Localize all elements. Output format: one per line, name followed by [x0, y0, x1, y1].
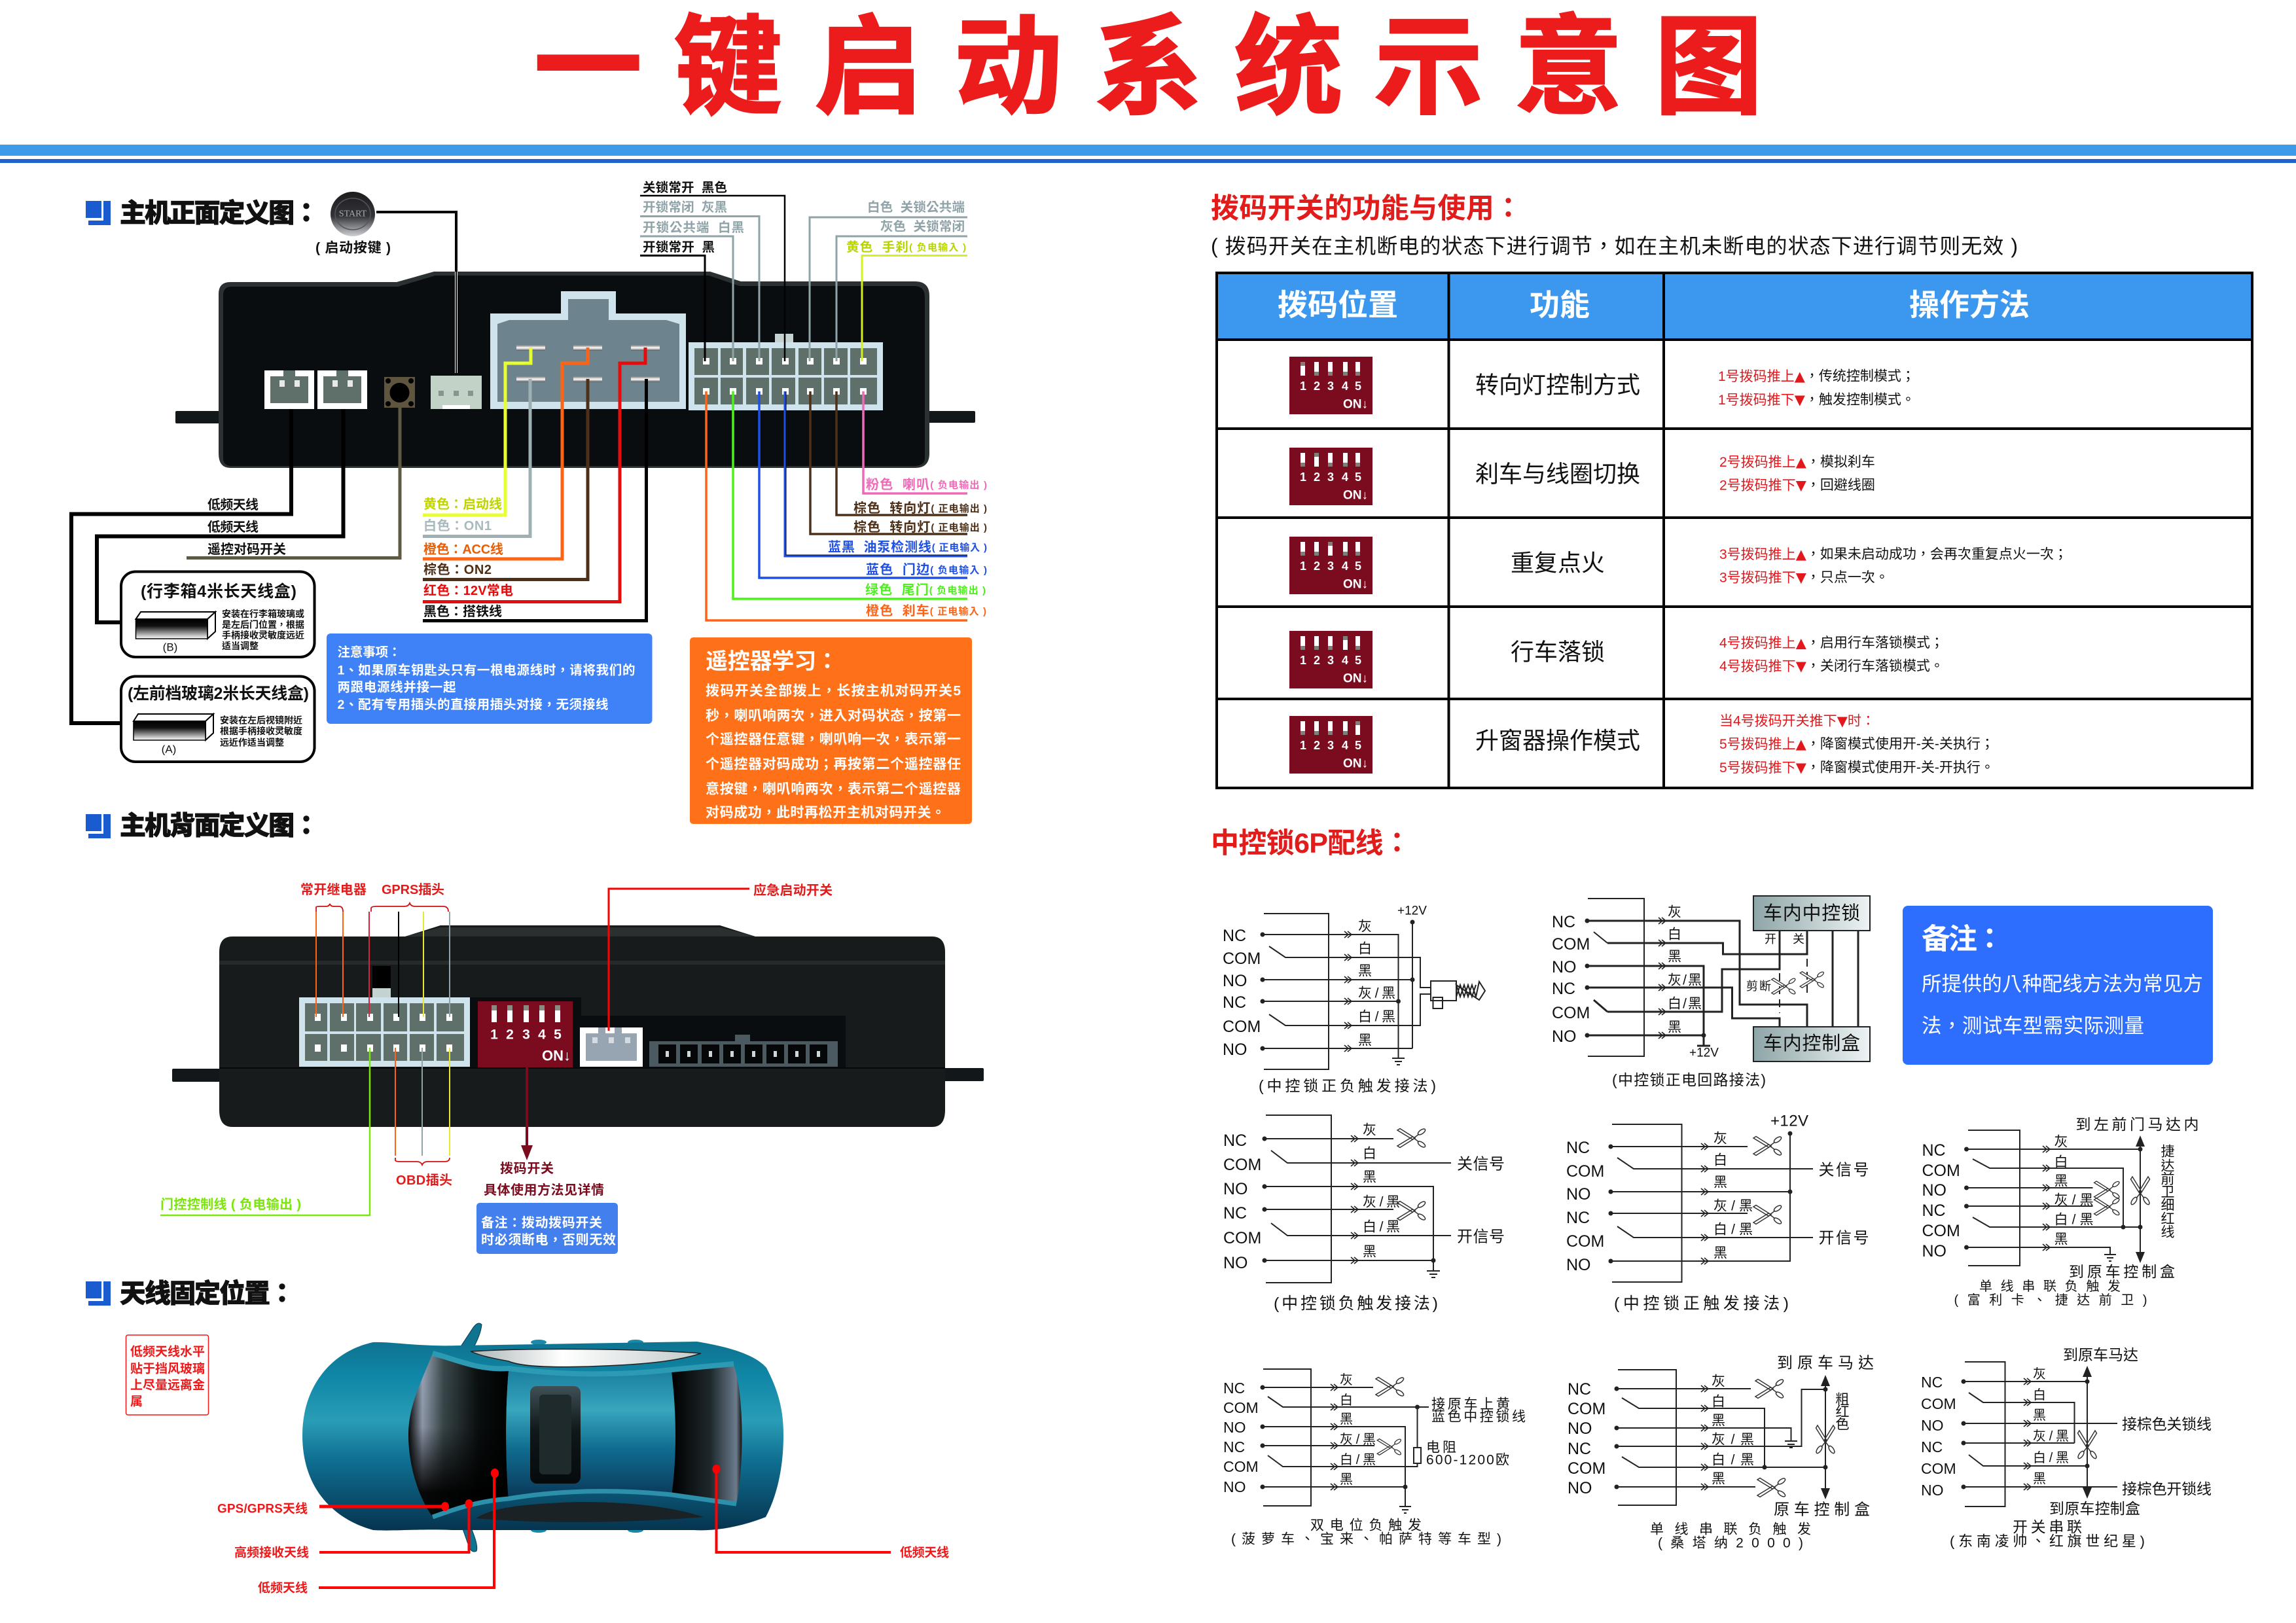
- wires: bottom of fourteen-pin plug with labels: [706, 391, 987, 620]
- diagram: negative trigger: NC: [1223, 1132, 1247, 1150]
- illustration: car from above: [302, 1323, 783, 1552]
- wires: bottom of fourteen-pin plug with labels: 棕色 转向灯( 正电输出 ): [853, 520, 987, 535]
- diagram: dual level negative trigger: NC: [1223, 1438, 1245, 1455]
- diagram: single wire series negative: NO: [1922, 1181, 1946, 1200]
- table: DIP switch functions: 功能: [1530, 288, 1590, 322]
- panel: back unit body: [172, 925, 984, 1127]
- diagram: positive and negative trigger: 灰: [1358, 919, 1372, 935]
- wires: top of fourteen-pin plug with labels: 黄色 手刹( 负电输入 ): [846, 240, 966, 255]
- diagram: positive circuit wiring: +12V: [1689, 1046, 1719, 1060]
- icon: DIP position 2: 12345: [1300, 471, 1361, 484]
- diagram: single wire series Santana: 单线串联负触发: [1650, 1522, 1811, 1537]
- heading: front definition: 主机正面定义图：: [120, 199, 319, 228]
- icon: DIP position 2: [1289, 448, 1372, 505]
- diagram: single wire series Santana: 白: [1712, 1394, 1725, 1410]
- diagram: positive circuit wiring: 黑: [1668, 949, 1681, 965]
- diagram: dual level negative trigger: 黑: [1340, 1412, 1353, 1427]
- diagram: negative trigger: 关信号: [1457, 1156, 1505, 1173]
- diagram: positive circuit wiring: 黑: [1668, 1020, 1681, 1035]
- text: DIP switch notice: ( 拨码开关在主机断电的状态下进行调节，如在主机未断电的状态下进行调节则无效 ): [1211, 234, 2018, 258]
- diagram: single wire series negative: 细: [2161, 1198, 2174, 1213]
- diagram: switch series: 白/黑: [2033, 1450, 2069, 1465]
- icon: DIP position 3: ON↓: [1343, 577, 1368, 592]
- wires: bottom of fourteen-pin plug with labels: 蓝色 门边( 负电输入 ): [866, 562, 987, 577]
- diagram: single wire series negative: 线: [2161, 1225, 2174, 1240]
- diagram: positive circuit wiring: 白: [1668, 927, 1681, 942]
- diagram: positive circuit wiring: NO: [1552, 1027, 1576, 1046]
- diagram: dual level negative trigger: 蓝色中控锁线: [1431, 1410, 1526, 1424]
- diagram: switch series: 到原车马达: [2063, 1346, 2138, 1363]
- diagram: switch series: 开关串联: [2013, 1518, 2082, 1535]
- diagram: positive trigger: NO: [1566, 1185, 1590, 1204]
- diagram: negative trigger: 黑: [1363, 1245, 1376, 1259]
- panel: remote learning: 秒，喇叭响两次，进入对码状态，按第一: [706, 708, 961, 724]
- diagram: positive trigger: (中控锁正触发接法): [1614, 1294, 1789, 1313]
- diagram: switch series: 灰: [2033, 1366, 2046, 1382]
- diagram: dual level negative trigger: 黑: [1340, 1472, 1353, 1487]
- diagram: switch series: NC: [1921, 1438, 1943, 1455]
- diagram: positive trigger: NC: [1566, 1139, 1590, 1157]
- diagram: switch series: 灰/黑: [2033, 1429, 2069, 1444]
- diagram: negative trigger: 白/黑: [1363, 1220, 1400, 1234]
- diagram: switch series: NC: [1921, 1374, 1943, 1391]
- diagram: positive circuit wiring: COM: [1552, 1004, 1590, 1022]
- callout: DIP power warning: [476, 1203, 618, 1254]
- diagram: negative trigger: 灰: [1363, 1123, 1376, 1137]
- diagram: dual level negative trigger: COM: [1223, 1399, 1259, 1416]
- diagram: switch series: 黑: [2033, 1408, 2046, 1423]
- diagram: dual level negative trigger: 白: [1340, 1393, 1353, 1408]
- diagram: single wire series negative: 捷: [2161, 1144, 2174, 1160]
- wires: bottom of fourteen-pin plug with labels: 橙色 刹车( 正电输入 ): [866, 603, 986, 618]
- diagram: positive trigger: 白: [1713, 1153, 1727, 1168]
- panel: trunk antenna box: [121, 572, 314, 657]
- diagram: dual level negative trigger: 灰/黑: [1340, 1432, 1376, 1447]
- wires: back lower with labels: 门控控制线 ( 负电输出 ): [160, 1196, 301, 1212]
- diagram: switch series: COM: [1921, 1395, 1956, 1412]
- table: DIP switch functions: [1217, 273, 2252, 788]
- wires: back upper with braces and labels: 常开继电器: [300, 882, 367, 897]
- icon: DIP position 4: ON↓: [1343, 671, 1368, 686]
- callouts: antenna positions: GPS/GPRS天线: [217, 1501, 308, 1516]
- callout: antenna mounting tip: [126, 1335, 208, 1415]
- wires: antenna and pairing with labels: [71, 408, 400, 723]
- diagram: single wire series Santana: 灰/黑: [1712, 1432, 1754, 1448]
- diagram: single wire series negative: 红: [2161, 1212, 2174, 1226]
- diagram: negative trigger: NO: [1223, 1254, 1247, 1272]
- diagram: single wire series Santana: 红: [1835, 1404, 1850, 1420]
- diagram: single wire series negative: 灰/黑: [2054, 1192, 2093, 1208]
- diagram: negative trigger: (中控锁负触发接法): [1274, 1294, 1438, 1313]
- wires: bottom of fourteen-pin plug with labels: 粉色 喇叭( 负电输出 ): [866, 477, 987, 492]
- diagram: positive trigger: NO: [1566, 1256, 1590, 1274]
- callouts: antenna positions: 高频接收天线: [234, 1544, 309, 1560]
- wires: top of fourteen-pin plug with labels: [640, 181, 967, 361]
- diagram: switch series: 接棕色开锁线: [2122, 1480, 2212, 1497]
- text: operation methods: 1号拨码推下▼，触发控制模式。: [1718, 392, 1915, 408]
- wires: top of fourteen-pin plug with labels: 关锁常开 黑色: [643, 181, 727, 195]
- diagram: single wire series Santana: [1568, 1355, 1874, 1551]
- diagram: switch series: COM: [1921, 1460, 1956, 1477]
- connector: eight-pin strip: [649, 1035, 838, 1067]
- icon: start button: ( 启动按键 ): [315, 241, 391, 255]
- diagram: dual level negative trigger: NO: [1223, 1419, 1246, 1436]
- diagram: positive trigger: 关信号: [1818, 1161, 1869, 1179]
- diagram: positive circuit wiring: (中控锁正电回路接法): [1612, 1071, 1766, 1088]
- diagram: positive circuit wiring: 灰: [1668, 904, 1681, 920]
- text: operation methods: 2号拨码推下▼，回避线圈: [1719, 478, 1875, 493]
- diagram: single wire series Santana: 色: [1835, 1418, 1850, 1432]
- diagram: negative trigger: COM: [1223, 1229, 1261, 1247]
- diagram: single wire series negative: NC: [1922, 1141, 1946, 1160]
- diagram: single wire series Santana: 原车控制盒: [1774, 1501, 1870, 1518]
- callout: wiring notes: 注意事项：: [338, 645, 401, 660]
- diagram: positive trigger: 灰: [1713, 1131, 1727, 1147]
- diagram: single wire series Santana: COM: [1568, 1459, 1605, 1478]
- wires: top of fourteen-pin plug with labels: 白色 关锁公共端: [867, 200, 965, 215]
- diagram: dual level negative trigger: 双电位负触发: [1310, 1518, 1422, 1533]
- wires: bottom of fourteen-pin plug with labels: 蓝黑 油泵检测线( 正电输入 ): [828, 539, 987, 555]
- diagram: positive and negative trigger: NO: [1223, 972, 1247, 990]
- diagram: positive trigger: 黑: [1713, 1175, 1727, 1190]
- diagram: positive circuit wiring: 白/黑: [1668, 996, 1702, 1012]
- table: DIP switch functions: 转向灯控制方式: [1475, 372, 1640, 398]
- callouts: antenna positions: 低频天线: [900, 1546, 949, 1560]
- diagram: single wire series Santana: 粗: [1835, 1393, 1850, 1407]
- connector: back twelve-pin plug: [299, 966, 470, 1067]
- icon: start button: START: [339, 209, 367, 219]
- panel: windshield antenna box: 根据手柄接收灵敏度: [220, 726, 302, 736]
- panel: windshield antenna box: 远近作适当调整: [220, 737, 284, 747]
- panel: front unit body: [175, 272, 975, 468]
- diagram: single wire series negative: 黑: [2054, 1232, 2068, 1247]
- diagram: single wire series Santana: 白/黑: [1712, 1453, 1754, 1467]
- diagram: negative trigger: NC: [1223, 1204, 1247, 1222]
- diagram: positive trigger: +12V: [1770, 1113, 1808, 1130]
- icon: DIP position 4: 12345: [1300, 654, 1361, 667]
- text: operation methods: 4号拨码推上▲，启用行车落锁模式；: [1719, 635, 1944, 651]
- diagram: positive trigger: 黑: [1713, 1246, 1727, 1260]
- diagram: dual level negative trigger: (菠萝车、宝来、帕萨特等车型): [1231, 1531, 1501, 1547]
- callout: DIP power warning: 时必须断电，否则无效: [481, 1232, 616, 1247]
- table: DIP switch functions: 刹车与线圈切换: [1475, 461, 1640, 487]
- callout: wiring notes: 1、如果原车钥匙头只有一根电源线时，请将我们的: [338, 662, 635, 678]
- diagram: dual level negative trigger: NO: [1223, 1478, 1246, 1495]
- wires: power plug with labels: 白色：ON1: [423, 518, 492, 533]
- icon: DIP position 5: ON↓: [1343, 757, 1368, 771]
- diagram: negative trigger: 开信号: [1457, 1228, 1505, 1246]
- wires: power plug with labels: 红色：12V常电: [423, 583, 513, 598]
- table: DIP switch functions: 升窗器操作模式: [1475, 727, 1640, 754]
- diagram: single wire series negative: 到原车控制盒: [2069, 1263, 2175, 1280]
- diagram: dual level negative trigger: 电阻: [1426, 1440, 1456, 1455]
- panel: trunk antenna box: 手柄接收灵敏度远近: [222, 630, 304, 640]
- text: operation methods: 1号拨码推上▲，传统控制模式；: [1718, 368, 1915, 384]
- diagram: positive and negative trigger: [1223, 904, 1485, 1094]
- diagram: positive and negative trigger: NC: [1223, 993, 1246, 1012]
- table: DIP switch functions: 操作方法: [1909, 288, 2030, 322]
- callout: wiring remark: 备注：: [1922, 923, 2004, 955]
- diagram: positive trigger: COM: [1566, 1232, 1604, 1251]
- panel: trunk antenna box: 安装在行李箱玻璃或: [222, 609, 304, 619]
- connector: large six-pin power plug: [490, 291, 686, 409]
- diagram: positive circuit wiring: 关: [1793, 933, 1804, 946]
- callout: wiring notes: [327, 633, 652, 724]
- panel: trunk antenna box: (B): [163, 641, 177, 653]
- wires: power plug with labels: 黄色：启动线: [423, 497, 502, 512]
- text: operation methods: [1718, 368, 2068, 776]
- panel: trunk antenna box: 适当调整: [222, 641, 259, 651]
- icon: DIP position 5: 12345: [1300, 739, 1361, 752]
- callout: wiring notes: 两跟电源线并接一起: [338, 679, 456, 695]
- wires: back upper with braces and labels: [300, 882, 833, 1031]
- diagram: negative trigger: 白: [1363, 1147, 1376, 1161]
- panel: windshield antenna box: (左前档玻璃2米长天线盒): [128, 684, 309, 703]
- panel: trunk antenna box: (行李箱4米长天线盒): [141, 582, 296, 601]
- diagram: single wire series negative: 白/黑: [2054, 1212, 2093, 1228]
- diagram: positive circuit wiring: NO: [1552, 958, 1576, 976]
- diagram: positive circuit wiring: COM: [1552, 935, 1590, 954]
- diagram: single wire series negative: (富利卡、捷达前卫): [1954, 1293, 2147, 1308]
- diagram: single wire series negative: 卫: [2161, 1185, 2174, 1200]
- wires: back lower with labels: [160, 1048, 452, 1215]
- table: DIP switch functions: 重复点火: [1511, 550, 1605, 576]
- diagram: positive circuit wiring: NC: [1552, 913, 1575, 931]
- callout: antenna mounting tip: 低频天线水平: [130, 1344, 205, 1359]
- text: operation methods: 5号拨码推上▲，降窗模式使用开-关-关执行；: [1719, 736, 1994, 752]
- diagram: single wire series negative: NC: [1922, 1202, 1946, 1220]
- icon: large DIP switch: ON↓: [542, 1047, 571, 1064]
- diagram: positive trigger: COM: [1566, 1162, 1604, 1181]
- text: operation methods: 3号拨码推下▼，只点一次。: [1719, 569, 1889, 585]
- wires: bottom of fourteen-pin plug with labels: 棕色 转向灯( 正电输出 ): [853, 501, 987, 516]
- wires: top of fourteen-pin plug with labels: 开锁公共端 白黑: [643, 221, 744, 235]
- diagram: positive and negative trigger: 黑: [1358, 963, 1372, 979]
- wires: back upper with braces and labels: 应急启动开关: [753, 882, 833, 898]
- callout: wiring notes: 2、配有专用插头的直接用插头对接，无须接线: [338, 698, 609, 712]
- panel: remote learning: 遥控器学习：: [706, 649, 838, 674]
- diagram: switch series: 接棕色关锁线: [2122, 1416, 2212, 1433]
- callouts: antenna positions: 低频天线: [258, 1581, 308, 1596]
- wires: back upper with braces and labels: GPRS插头: [382, 882, 444, 897]
- heading: DIP switch usage: 拨码开关的功能与使用：: [1211, 193, 1522, 224]
- header band: [0, 145, 2296, 163]
- callout: antenna mounting tip: 属: [130, 1395, 143, 1408]
- icon: pairing tact switch: [384, 377, 415, 408]
- panel: remote learning: 个遥控器任意键，喇叭响一次，表示第一: [706, 732, 961, 747]
- diagram: single wire series Santana: NO: [1568, 1479, 1592, 1497]
- diagram: negative trigger: NO: [1223, 1180, 1247, 1198]
- wires: power plug with labels: 橙色：ACC线: [423, 542, 503, 557]
- icon: start button: [315, 192, 391, 255]
- diagram: single wire series negative: 黑: [2054, 1174, 2068, 1188]
- text: operation methods: 4号拨码推下▼，关闭行车落锁模式。: [1719, 658, 1944, 674]
- diagram: switch series: (东南凌帅、红旗世纪星): [1950, 1533, 2145, 1550]
- diagram: negative trigger: COM: [1223, 1156, 1261, 1174]
- diagram: single wire series negative: 前: [2161, 1171, 2174, 1187]
- icon: large DIP switch: [478, 1001, 573, 1067]
- diagram: single wire series Santana: 黑: [1712, 1471, 1725, 1487]
- diagram: positive and negative trigger: COM: [1223, 1018, 1261, 1036]
- callout: antenna mounting tip: 上尽量远离金: [130, 1377, 205, 1393]
- diagram: switch series: [1921, 1346, 2212, 1550]
- diagram: negative trigger: 黑: [1363, 1170, 1376, 1185]
- diagram: dual level negative trigger: 白/黑: [1340, 1452, 1376, 1467]
- diagram: positive trigger: NC: [1566, 1209, 1590, 1227]
- diagram: positive circuit wiring: 开: [1765, 933, 1776, 946]
- title: 一键启动系统示意图: [534, 7, 1795, 128]
- connectors: antenna plugs: [264, 370, 367, 409]
- diagram: single wire series Santana: COM: [1568, 1400, 1605, 1418]
- wires: back lower with labels: OBD插头: [396, 1173, 452, 1188]
- diagram: negative trigger: [1223, 1115, 1505, 1313]
- diagram: positive and negative trigger: COM: [1223, 950, 1261, 968]
- diagram: positive trigger: [1566, 1113, 1869, 1313]
- diagram: single wire series Santana: (桑塔纳2000): [1658, 1535, 1803, 1551]
- diagram: single wire series negative: [1922, 1116, 2199, 1308]
- wires: antenna and pairing with labels: 低频天线: [207, 497, 259, 512]
- diagram: positive circuit wiring: 车内控制盒: [1763, 1033, 1860, 1054]
- callout: DIP power warning: 备注：拨动拨码开关: [481, 1215, 602, 1230]
- wires: antenna and pairing with labels: 低频天线: [207, 520, 259, 535]
- connector: fourteen-pin plug: [689, 334, 883, 410]
- icon: DIP position 1: [1289, 357, 1372, 414]
- diagram: positive and negative trigger: (中控锁正负触发接法): [1259, 1077, 1436, 1094]
- diagram: positive circuit wiring: [1552, 896, 1870, 1088]
- diagram: positive and negative trigger: 灰/黑: [1358, 986, 1395, 1001]
- callout: antenna mounting tip: 贴于挡风玻璃: [130, 1361, 205, 1376]
- icon: DIP position 5: [1289, 716, 1372, 774]
- wire: start button: [376, 212, 456, 373]
- text: operation methods: 5号拨码推下▼，降窗模式使用开-关-开执行。: [1719, 760, 1994, 776]
- arrow: to DIP switch label: 拨码开关: [500, 1161, 554, 1176]
- diagram: single wire series negative: COM: [1922, 1162, 1960, 1180]
- diagram: single wire series negative: 白: [2054, 1154, 2068, 1170]
- wires: power plug with labels: 黑色：搭铁线: [423, 604, 502, 619]
- arrow: to DIP switch label: 具体使用方法见详情: [484, 1182, 604, 1198]
- table: DIP switch functions: 行车落锁: [1511, 639, 1605, 665]
- diagram: single wire series Santana: NC: [1568, 1440, 1591, 1458]
- heading: antenna position: 天线固定位置：: [120, 1279, 295, 1308]
- diagram: single wire series Santana: 黑: [1712, 1414, 1725, 1428]
- diagram: single wire series negative: COM: [1922, 1222, 1960, 1240]
- wires: top of fourteen-pin plug with labels: 开锁常闭 灰黑: [643, 200, 727, 215]
- icon: DIP position 2: ON↓: [1343, 488, 1368, 503]
- diagram: switch series: NO: [1921, 1417, 1944, 1434]
- icon: DIP position 3: [1289, 537, 1372, 594]
- diagram: dual level negative trigger: COM: [1223, 1458, 1259, 1475]
- diagram: positive and negative trigger: 白/黑: [1358, 1009, 1395, 1025]
- diagram: dual level negative trigger: [1223, 1369, 1526, 1547]
- diagram: switch series: 到原车控制盒: [2049, 1500, 2140, 1517]
- icon: DIP position 4: [1289, 631, 1372, 688]
- callout: wiring remark: 法，测试车型需实际测量: [1922, 1015, 2144, 1037]
- diagram: positive trigger: 开信号: [1818, 1229, 1869, 1247]
- diagram: positive and negative trigger: NO: [1223, 1041, 1247, 1059]
- diagram: positive trigger: 白/黑: [1713, 1222, 1753, 1237]
- icon: DIP position 3: 12345: [1300, 560, 1361, 573]
- diagram: dual level negative trigger: 接原车上黄: [1431, 1397, 1510, 1412]
- wires: antenna and pairing with labels: 遥控对码开关: [207, 541, 286, 557]
- panel: remote learning: [690, 637, 972, 824]
- diagram: switch series: NO: [1921, 1482, 1944, 1499]
- callout: wiring remark: 所提供的八种配线方法为常见方: [1922, 973, 2203, 995]
- callouts: antenna positions: [217, 1465, 949, 1596]
- heading: back definition: 主机背面定义图：: [120, 812, 319, 840]
- diagram: positive and negative trigger: +12V: [1397, 904, 1427, 918]
- diagram: single wire series Santana: 到原车马达: [1777, 1355, 1874, 1372]
- diagram: negative trigger: 灰/黑: [1363, 1195, 1400, 1209]
- panel: remote learning: 意按键，喇叭响两次，表示第二个遥控器: [706, 781, 961, 797]
- diagram: dual level negative trigger: NC: [1223, 1380, 1245, 1397]
- text: operation methods: 2号拨码推上▲，模拟刹车: [1719, 454, 1875, 470]
- diagram: positive circuit wiring: 灰/黑: [1668, 972, 1702, 988]
- arrow: to DIP switch label: [484, 1067, 604, 1198]
- panel: remote learning: 对码成功，此时再松开主机对码开关。: [706, 805, 945, 821]
- diagram: single wire series negative: 单线串联负触发: [1979, 1279, 2121, 1294]
- diagram: single wire series Santana: 灰: [1712, 1374, 1725, 1389]
- wires: power plug with labels: [423, 348, 647, 620]
- panel: remote learning: 拨码开关全部拨上，长按主机对码开关5: [706, 683, 961, 699]
- icon: DIP position 1: ON↓: [1343, 398, 1368, 411]
- diagram: positive and negative trigger: NC: [1223, 927, 1246, 945]
- diagram: dual level negative trigger: 灰: [1340, 1372, 1353, 1387]
- diagram: single wire series negative: 到左前门马达内: [2076, 1116, 2199, 1133]
- panel: windshield antenna box: [121, 677, 314, 762]
- connector: emergency switch socket: [580, 1027, 643, 1067]
- diagram: switch series: 黑: [2033, 1472, 2046, 1486]
- diagram: positive circuit wiring: 车内中控锁: [1763, 902, 1860, 924]
- panel: windshield antenna box: 安装在左后视镜附近: [220, 715, 302, 725]
- text: operation methods: 3号拨码推上▲，如果未启动成功，会再次重复点火一次；: [1719, 546, 2068, 562]
- diagram: positive and negative trigger: 白: [1358, 941, 1372, 957]
- diagram: dual level negative trigger: 600-1200欧: [1426, 1453, 1509, 1467]
- diagram: single wire series Santana: NO: [1568, 1419, 1592, 1438]
- panel: remote learning: 个遥控器对码成功；再按第二个遥控器任: [706, 757, 961, 772]
- diagram: positive circuit wiring: NC: [1552, 980, 1575, 998]
- table: DIP switch functions: 拨码位置: [1278, 288, 1398, 322]
- callout: wiring remark: [1903, 906, 2213, 1065]
- heading: central lock wiring: 中控锁6P配线：: [1211, 828, 1411, 859]
- connector: white socket: [431, 376, 482, 409]
- wires: power plug with labels: 棕色：ON2: [423, 562, 492, 577]
- wires: top of fourteen-pin plug with labels: 灰色 关锁常闭: [880, 220, 965, 234]
- wires: bottom of fourteen-pin plug with labels: 绿色 尾门( 负电输出 ): [865, 582, 986, 597]
- diagram: switch series: 白: [2033, 1387, 2046, 1402]
- wires: top of fourteen-pin plug with labels: 开锁常开 黑: [643, 240, 715, 255]
- diagram: positive trigger: 灰/黑: [1713, 1199, 1753, 1213]
- panel: windshield antenna box: (A): [162, 743, 176, 755]
- diagram: single wire series negative: NO: [1922, 1242, 1946, 1260]
- icon: DIP position 1: 12345: [1300, 380, 1361, 393]
- panel: trunk antenna box: 是左后门位置，根据: [222, 619, 304, 630]
- icon: large DIP switch: 12345: [490, 1027, 562, 1042]
- diagram: single wire series negative: 达: [2161, 1158, 2174, 1174]
- diagram: positive circuit wiring: 剪断: [1746, 980, 1771, 993]
- diagram: single wire series negative: 灰: [2054, 1135, 2068, 1149]
- text: operation methods: 当4号拨码开关推下▼时：: [1719, 713, 1875, 729]
- diagram: single wire series Santana: NC: [1568, 1380, 1591, 1399]
- diagram: positive and negative trigger: 黑: [1358, 1033, 1372, 1048]
